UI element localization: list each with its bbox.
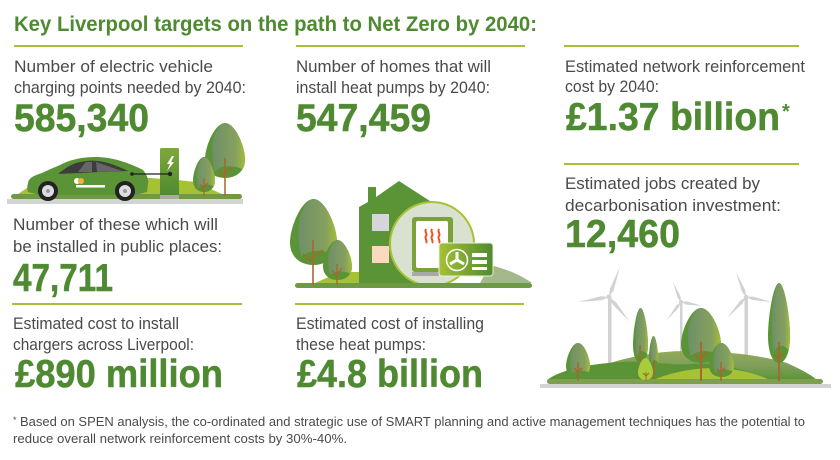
text: reinforcement cost label: cost by 2040: — [565, 77, 659, 96]
icon: house with heat pump and trees — [290, 181, 532, 288]
text: charging points label: Number of electric vehicle — [14, 57, 213, 76]
number: charging points: 585,340 — [14, 97, 149, 140]
text: jobs label: Estimated jobs created by — [565, 174, 760, 193]
text: public places label: be installed in public places: — [13, 237, 222, 256]
text: public places label: Number of these which will — [13, 215, 218, 234]
text: heat pump cost label: these heat pumps: — [296, 335, 426, 354]
title: Key Liverpool targets on the path to Net Zero by 2040: — [14, 13, 537, 36]
number: charger cost: £890 million — [15, 353, 223, 396]
footnote asterisk: * — [782, 101, 790, 123]
footnote: * — [13, 415, 17, 425]
text: reinforcement cost label: Estimated network reinforcement — [565, 57, 805, 76]
icon: wind turbines on hills with trees — [540, 267, 831, 388]
text: charging points label: charging points needed by 2040: — [14, 78, 246, 97]
number: public places: 47,711 — [13, 257, 113, 300]
number: heat pump homes: 547,459 — [296, 97, 431, 140]
number: jobs: 12,460 — [565, 213, 680, 256]
text: heat pump homes label: Number of homes that will — [296, 57, 491, 76]
footnote: Based on SPEN analysis, the co-ordinated and strategic use of SMART planning and active management techniques has the potential to — [20, 415, 805, 429]
number: heat pump cost: £4.8 billion — [297, 353, 483, 396]
footnote: reduce overall network reinforcement costs by 30%-40%. — [13, 432, 347, 446]
text: charger cost label: Estimated cost to install — [13, 314, 179, 333]
panel: network and jobs — [540, 45, 831, 388]
text: charger cost label: chargers across Liverpool: — [13, 335, 194, 354]
panel: heat pumps — [290, 45, 532, 396]
text: heat pump homes label: install heat pumps by 2040: — [296, 78, 490, 97]
icon: electric car at charger with trees — [7, 123, 245, 204]
panel: electric vehicle charging — [7, 45, 246, 396]
text: jobs label: decarbonisation investment: — [565, 196, 781, 215]
number: reinforcement cost: £1.37 billion — [566, 96, 780, 139]
text: heat pump cost label: Estimated cost of installing — [296, 314, 484, 333]
